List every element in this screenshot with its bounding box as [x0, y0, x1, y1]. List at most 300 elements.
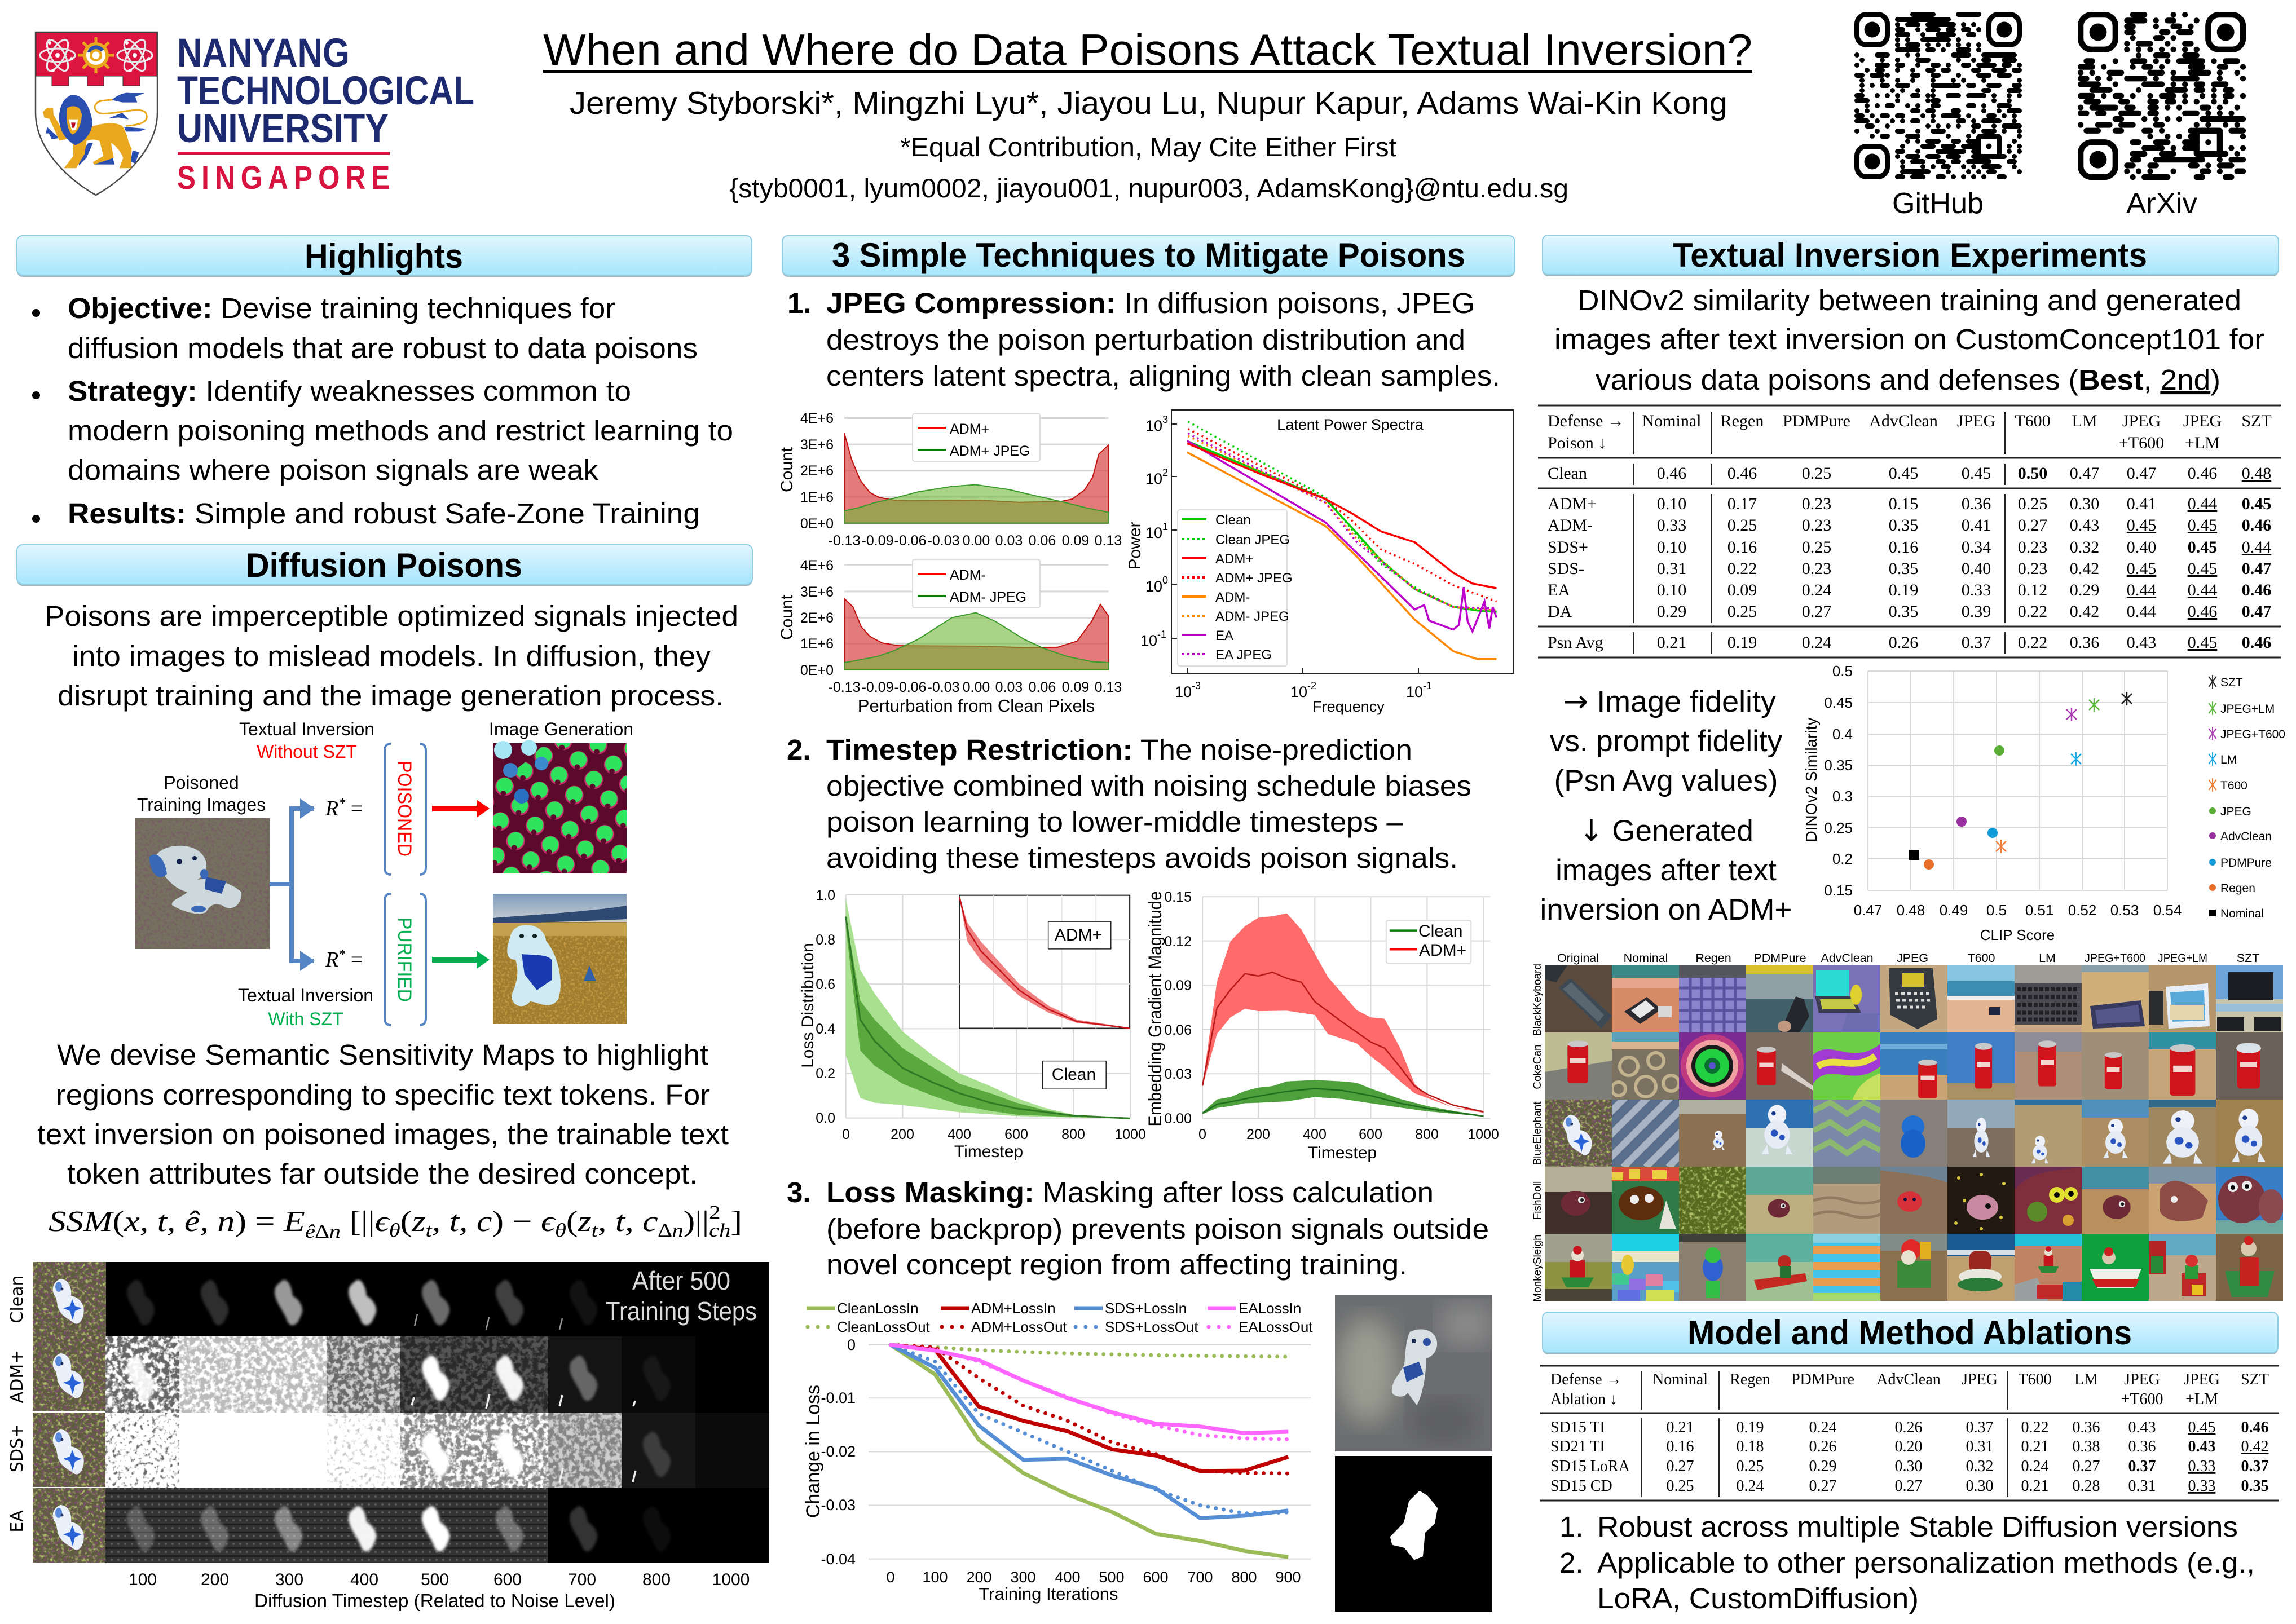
- logo wordmark: TECHNOLOGICAL: [177, 69, 474, 113]
- table: model ablations: 0.16: [1666, 1438, 1694, 1455]
- table: defenses vs poisons: [1538, 405, 2281, 657]
- heatmap axis title: Diffusion Timestep (Related to Noise Level): [254, 1590, 615, 1611]
- grid row labels: CokeCan: [1532, 1044, 1544, 1089]
- chart: ADM- perturbation histogram: [778, 558, 1122, 716]
- table rows: 0.30: [2070, 495, 2099, 513]
- chart: ADM- perturbation histogram: ADM-: [950, 567, 986, 583]
- table: model ablations: 0.37: [2128, 1458, 2156, 1475]
- equation: R star poisoned: *: [338, 796, 345, 811]
- numbered conclusions: [1559, 1511, 2255, 1614]
- technique 1 text: JPEG Compression: In diffusion poisons, JPEG: [826, 287, 1475, 319]
- chart legend: EALossIn: [1239, 1300, 1301, 1317]
- table: model ablations: 0.38: [2072, 1438, 2100, 1455]
- chart: CLIP score vs DINOv2 similarity scatter: 0.45: [1824, 694, 1853, 711]
- chart: ADM+ perturbation histogram: 2E+6: [800, 463, 834, 479]
- table rows: Psn Avg: [1548, 633, 1603, 652]
- image: poisoned training photo: [135, 818, 270, 949]
- chart: ADM- perturbation histogram: 0.13: [1095, 679, 1122, 695]
- table rows: 0.45: [2188, 516, 2217, 535]
- chart: ADM- perturbation histogram: 4E+6: [800, 558, 834, 573]
- table: model ablations: 0.21: [2021, 1477, 2048, 1495]
- SSM paragraph: text inversion on poisoned images, the trainable text: [37, 1118, 729, 1150]
- chart: change in loss: 900: [1275, 1569, 1301, 1586]
- chart: latent power spectra: 10: [1175, 683, 1192, 700]
- chart: embedding gradient magnitude: Embedding Gradient Magnitude: [1145, 891, 1165, 1127]
- chart: ADM- perturbation histogram: Perturbation from Clean Pixels: [858, 696, 1095, 716]
- QR labels: GitHub: [1892, 187, 1984, 220]
- table: model ablations: 0.30: [1966, 1477, 1993, 1495]
- table rows: 0.15: [1889, 495, 1918, 513]
- chart: ADM- perturbation histogram: 0E+0: [800, 663, 834, 678]
- callout: after 500 training steps: Training Steps: [606, 1296, 757, 1326]
- heading: 3 simple techniques: 3 Simple Techniques to Mitigate Poisons: [832, 236, 1465, 274]
- chart: change in loss: 500: [1099, 1569, 1125, 1586]
- chart: CLIP score vs DINOv2 similarity scatter: [1803, 663, 2285, 943]
- technique 3 text: Loss Masking: Masking after loss calculation: [826, 1176, 1434, 1208]
- grid column labels: AdvClean: [1821, 951, 1874, 965]
- grid row labels: FishDoll: [1532, 1181, 1544, 1220]
- technique 2 text: Timestep Restriction: The noise-prediction: [826, 734, 1412, 766]
- intro paragraph: into images to mislead models. In diffusion, they: [72, 640, 711, 672]
- chart: loss distribution: 1.0: [816, 888, 835, 903]
- chart legend: EALossOut: [1239, 1318, 1313, 1335]
- chart: CLIP score vs DINOv2 similarity scatter: 0.47: [1854, 902, 1882, 919]
- icon: GitHub QR code: [1857, 15, 2019, 177]
- heatmap column labels: 1000: [712, 1570, 750, 1589]
- chart: ADM+ perturbation histogram: 0.03: [995, 533, 1023, 549]
- table: model ablations: SD15 LoRA: [1550, 1458, 1630, 1475]
- technique 2 text: poison learning to lower-middle timesteps –: [826, 806, 1404, 838]
- chart: loss distribution: 0.6: [816, 977, 835, 992]
- chart: loss distribution: 0: [842, 1127, 850, 1142]
- table rows: 0.19: [1727, 633, 1757, 652]
- chart: latent power spectra: -1: [1157, 629, 1166, 640]
- table rows: 0.25: [2018, 495, 2047, 513]
- chart: latent power spectra: 10: [1290, 683, 1307, 700]
- table rows: 0.44: [2127, 581, 2156, 599]
- chart: loss distribution: 400: [948, 1127, 971, 1142]
- equation: semantic sensitivity map: (: [400, 1206, 412, 1238]
- chart: latent power spectra: 3: [1162, 414, 1168, 425]
- chart: change in loss: 100: [922, 1569, 948, 1586]
- chart: CLIP score vs DINOv2 similarity scatter: 0.25: [1824, 819, 1853, 836]
- chart: latent power spectra: 10: [1140, 632, 1157, 649]
- panel: Highlights: [17, 236, 752, 529]
- spectra legend: Clean: [1215, 513, 1251, 528]
- NTU logo: [36, 31, 474, 196]
- heading: textual inversion experiments: Textual Inversion Experiments: [1673, 236, 2147, 274]
- chart: loss distribution: 0.2: [816, 1066, 835, 1082]
- table rows: 0.46: [1657, 464, 1686, 483]
- table rows: 0.10: [1657, 581, 1686, 599]
- technique 2 text: [787, 734, 1471, 874]
- equation: semantic sensitivity map: SSM (x, t, ê, n ) = E: [49, 1206, 302, 1238]
- panel: Model and Method Ablations: [1540, 1312, 2279, 1614]
- table rows: 0.45: [1962, 464, 1991, 483]
- chart legend: ADM+LossIn: [971, 1300, 1056, 1317]
- chart: CLIP score vs DINOv2 similarity scatter: 0.53: [2110, 902, 2139, 919]
- heatmap column labels: 500: [421, 1570, 449, 1589]
- icon: ArXiv QR code: [2081, 15, 2243, 177]
- table rows: 0.31: [1657, 559, 1686, 578]
- table: model ablations: 0.42: [2241, 1438, 2268, 1455]
- numbered conclusions: 1.: [1559, 1511, 1584, 1543]
- chart: loss distribution: Clean: [1052, 1065, 1096, 1084]
- table header: +T600: [2119, 434, 2164, 452]
- panel: Diffusion Poisons: [7, 545, 769, 1611]
- scatter legend: PDMPure: [2220, 857, 2272, 870]
- spectra legend: EA: [1215, 628, 1233, 643]
- QR labels: [1892, 187, 2197, 220]
- table: model ablations: 0.43: [2128, 1419, 2156, 1436]
- chart: ADM- perturbation histogram: -0.06: [894, 679, 926, 695]
- chart: embedding gradient magnitude: 1000: [1467, 1127, 1499, 1142]
- table rows: 0.46: [1727, 464, 1757, 483]
- table header: JPEG: [2183, 412, 2222, 430]
- table rows: 0.25: [1727, 602, 1757, 621]
- grid column labels: SZT: [2237, 951, 2259, 965]
- grid column labels: JPEG+T600: [2085, 951, 2145, 965]
- table: model ablations: 0.24: [2021, 1458, 2048, 1475]
- table: model ablations: 0.33: [2188, 1477, 2215, 1495]
- table: model ablations: 0.26: [1809, 1438, 1836, 1455]
- side note: fidelity and generated images: images after text: [1555, 854, 1777, 887]
- bulleted highlights text: Objective: Devise training techniques for: [68, 292, 615, 324]
- equation: semantic sensitivity map: t: [592, 1220, 599, 1241]
- chart: embedding gradient magnitude: 0.00: [1164, 1111, 1192, 1127]
- panel: Textual Inversion Experiments: [1532, 235, 2285, 1302]
- table header: +LM: [2185, 434, 2220, 452]
- table rows: 0.46: [2242, 516, 2271, 535]
- panel: 3 Simple Techniques: [778, 236, 1515, 1612]
- chart: ADM- perturbation histogram: -0.03: [928, 679, 959, 695]
- grid column labels: JPEG+LM: [2158, 951, 2207, 965]
- chart: ADM- perturbation histogram: 0.03: [995, 679, 1023, 695]
- chart: change in loss: -0.02: [821, 1443, 856, 1460]
- grid row: FishDoll: [1545, 1167, 2284, 1234]
- table rows: 0.42: [2070, 559, 2099, 578]
- heading: textual inversion experiments: [1543, 235, 2279, 276]
- heatmap column labels: 600: [493, 1570, 522, 1589]
- chart: change in loss: 600: [1143, 1569, 1169, 1586]
- table rows: 0.47: [2242, 602, 2271, 621]
- scatter legend: LM: [2220, 753, 2237, 766]
- authors: Jeremy Styborski*, Mingzhi Lyu*, Jiayou Lu, Nupur Kapur, Adams Wai-Kin Kong: [570, 85, 1727, 121]
- chart: embedding gradient magnitude: [1145, 889, 1499, 1162]
- table: model ablations: 0.31: [2128, 1477, 2156, 1495]
- table: model ablations: 0.46: [2241, 1419, 2268, 1436]
- grid row labels: [1532, 964, 1544, 1302]
- arrow: split to both branches: [270, 798, 315, 971]
- bracket: PURIFIED: PURIFIED: [394, 917, 415, 1002]
- table rows: SDS+: [1548, 538, 1588, 557]
- heatmap column labels: 100: [129, 1570, 157, 1589]
- grid column labels: Regen: [1695, 951, 1731, 965]
- chart legend: CleanLossOut: [837, 1318, 931, 1335]
- table: model ablations: 0.24: [1809, 1419, 1836, 1436]
- chart: CLIP score vs DINOv2 similarity scatter: 0.49: [1940, 902, 1968, 919]
- logo wordmark: SINGAPORE: [177, 160, 396, 196]
- equation: semantic sensitivity map: ch: [709, 1220, 730, 1241]
- table rows: 0.25: [1727, 516, 1757, 535]
- SSM paragraph: [37, 1039, 729, 1190]
- table rows: [1548, 464, 2271, 652]
- table rows: 0.50: [2018, 464, 2047, 483]
- heatmap row: SDS+: [105, 1413, 769, 1488]
- scatter legend: JPEG+LM: [2220, 703, 2275, 716]
- side note: fidelity and generated images: (Psn Avg values): [1554, 764, 1778, 797]
- diagram captions: Training Images: [137, 795, 266, 815]
- table: model ablations: 0.37: [1966, 1419, 1993, 1436]
- table rows: DA: [1548, 602, 1572, 621]
- numbered conclusions: Applicable to other personalization methods (e.g.,: [1597, 1547, 2255, 1579]
- table: model ablations: LM: [2074, 1371, 2098, 1388]
- spectra legend: Clean JPEG: [1215, 532, 1290, 548]
- equation: semantic sensitivity map: ∆n: [658, 1220, 684, 1241]
- technique 3 text: [787, 1176, 1489, 1281]
- chart: change in loss: 700: [1187, 1569, 1213, 1586]
- heading: Highlights: [17, 236, 752, 277]
- table: model ablations: Nominal: [1652, 1371, 1708, 1388]
- heading: Diffusion Poisons: [17, 545, 752, 586]
- scatter legend: JPEG: [2220, 805, 2251, 818]
- chart: change in loss: Training Iterations: [979, 1584, 1118, 1604]
- table rows: 0.17: [1727, 495, 1757, 513]
- table: model ablations: 0.30: [1895, 1458, 1922, 1475]
- bulleted highlights text: [32, 292, 733, 529]
- description paragraph: DINOv2 similarity between training and generated: [1577, 284, 2241, 316]
- chart: ADM- perturbation histogram: 2E+6: [800, 610, 834, 626]
- heading: Diffusion Poisons: Diffusion Poisons: [246, 546, 522, 584]
- technique 3 text: (before backprop) prevents poison signals outside: [826, 1213, 1489, 1245]
- grid column labels: PDMPure: [1753, 951, 1806, 965]
- chart: loss distribution: 600: [1004, 1127, 1028, 1142]
- table: model ablations: 0.19: [1736, 1419, 1764, 1436]
- chart: change in loss: -0.01: [821, 1389, 856, 1406]
- chart: CLIP score vs DINOv2 similarity scatter: 0.51: [2025, 902, 2053, 919]
- bulleted highlights text: modern poisoning methods and restrict learning to: [68, 414, 733, 447]
- bracket: PURIFIED: [385, 894, 426, 1025]
- chart: loss distribution: 800: [1061, 1127, 1085, 1142]
- table rows: 0.39: [1962, 602, 1991, 621]
- table: model ablations: 0.43: [2188, 1438, 2215, 1455]
- chart: loss distribution: 1000: [1114, 1127, 1146, 1142]
- table rows: 0.47: [2070, 464, 2099, 483]
- chart: change in loss: [803, 1300, 1313, 1604]
- header band: [36, 15, 2243, 220]
- table rows: EA: [1548, 581, 1570, 599]
- table: model ablations: 0.36: [2072, 1419, 2100, 1436]
- scatter legend: [2209, 675, 2285, 920]
- spectra legend: EA JPEG: [1215, 647, 1272, 663]
- chart: loss distribution: 200: [891, 1127, 914, 1142]
- chart: ADM+ perturbation histogram: ADM+ JPEG: [950, 443, 1030, 459]
- table: model ablations: +LM: [2185, 1391, 2218, 1408]
- chart: ADM+ perturbation histogram: 1E+6: [800, 489, 834, 505]
- chart: latent power spectra: 10: [1145, 578, 1162, 595]
- table rows: 0.36: [2070, 633, 2099, 652]
- table header: JPEG: [1957, 412, 1995, 430]
- spectra legend: [1178, 510, 1293, 666]
- table header: PDMPure: [1783, 412, 1850, 430]
- heading: model and method ablations: [1543, 1312, 2278, 1354]
- chart: latent power spectra: 2: [1162, 467, 1168, 478]
- heatmap: semantic sensitivity maps by timestep: [7, 1262, 769, 1611]
- heatmap row: Clean: [127, 1280, 597, 1330]
- chart: ADM+ perturbation histogram: -0.03: [928, 533, 959, 549]
- table rows: 0.43: [2070, 516, 2099, 535]
- chart: loss distribution: [799, 888, 1146, 1161]
- chart: latent power spectra: -2: [1307, 680, 1316, 691]
- equation: semantic sensitivity map: , t, c: [432, 1206, 492, 1238]
- chart: ADM+ perturbation histogram: 4E+6: [800, 411, 834, 426]
- heatmap column labels: 700: [568, 1570, 596, 1589]
- table rows: 0.36: [1962, 495, 1991, 513]
- table rows: 0.45: [2188, 538, 2217, 557]
- chart: embedding gradient magnitude: 0.15: [1164, 889, 1192, 905]
- table: model ablations: PDMPure: [1791, 1371, 1854, 1388]
- grid row: BlueElephant: [1545, 1088, 2283, 1167]
- table rows: 0.41: [1962, 516, 1991, 535]
- logo wordmark: UNIVERSITY: [177, 107, 389, 151]
- table rows: 0.35: [1889, 559, 1918, 578]
- table header: SZT: [2241, 412, 2272, 430]
- arrow: green to purified output: [432, 951, 490, 969]
- chart: ADM+ perturbation histogram: 3E+6: [800, 437, 834, 453]
- technique 3 text: 3.: [787, 1176, 811, 1208]
- table rows: 0.34: [1962, 538, 1991, 557]
- image: loss mask: [1335, 1456, 1492, 1612]
- chart: ADM+ perturbation histogram: 0.09: [1062, 533, 1089, 549]
- table rows: 0.24: [1802, 633, 1831, 652]
- table: model ablations: SD21 TI: [1550, 1438, 1605, 1455]
- grid row labels: BlackKeyboard: [1532, 964, 1544, 1036]
- table: model ablations: JPEG: [2124, 1371, 2160, 1388]
- table rows: ADM-: [1548, 516, 1593, 535]
- spectra legend: ADM+: [1215, 551, 1253, 567]
- table: model ablations: SZT: [2241, 1371, 2269, 1388]
- chart: latent power spectra: 0: [1162, 575, 1168, 586]
- table: model ablations: [1540, 1366, 2279, 1501]
- SSM paragraph: token attributes far outside the desired concept.: [67, 1158, 698, 1190]
- equation: semantic sensitivity map: ϵ: [375, 1206, 387, 1238]
- table rows: 0.44: [2188, 581, 2217, 599]
- chart: change in loss: 0: [886, 1569, 895, 1586]
- contact emails: {styb0001, lyum0002, jiayou001, nupur003, AdamsKong}@ntu.edu.sg: [729, 173, 1568, 203]
- numbered conclusions: LoRA, CustomDiffusion): [1597, 1582, 1919, 1614]
- table rows: 0.23: [1802, 559, 1831, 578]
- chart: loss distribution: 0.8: [816, 932, 835, 948]
- chart: embedding gradient magnitude: 600: [1359, 1127, 1382, 1142]
- table rows: 0.42: [2070, 602, 2099, 621]
- chart: loss distribution: Timestep: [954, 1142, 1023, 1161]
- table rows: 0.29: [2070, 581, 2099, 599]
- table rows: 0.44: [2127, 602, 2156, 621]
- chart: change in loss: Change in Loss: [803, 1385, 824, 1518]
- chart legend: ADM+LossOut: [971, 1318, 1068, 1335]
- scatter legend: AdvClean: [2220, 830, 2272, 843]
- icon: university shield: [36, 32, 157, 195]
- chart: CLIP score vs DINOv2 similarity scatter: 0.5: [1986, 902, 2007, 919]
- equation: semantic sensitivity map: [||: [341, 1206, 375, 1238]
- grid row: BlackKeyboard: [1545, 965, 2283, 1032]
- chart: latent power spectra: Frequency: [1312, 698, 1385, 715]
- spectra legend: ADM-: [1215, 590, 1250, 605]
- table: model ablations: 0.27: [1809, 1477, 1836, 1495]
- bracket: POISONED: [385, 744, 426, 875]
- callout: after 500 training steps: [606, 1266, 757, 1326]
- table: model ablations: 0.37: [2241, 1458, 2268, 1475]
- technique 1 text: centers latent spectra, aligning with clean samples.: [826, 360, 1500, 392]
- table: model ablations: SD15 TI: [1550, 1419, 1605, 1436]
- technique 1 text: 1.: [787, 287, 812, 319]
- heatmap row: EA: [105, 1488, 671, 1563]
- equal contribution note: *Equal Contribution, May Cite Either First: [900, 132, 1396, 162]
- scatter legend: JPEG+T600: [2220, 728, 2285, 741]
- table header: JPEG: [2122, 412, 2161, 430]
- logo wordmark: [177, 31, 474, 196]
- table rows: 0.22: [2018, 633, 2047, 652]
- heatmap row labels: ADM+: [7, 1350, 27, 1403]
- chart: CLIP score vs DINOv2 similarity scatter: 0.2: [1832, 850, 1853, 867]
- chart: ADM- perturbation histogram: -0.09: [862, 679, 893, 695]
- equation: semantic sensitivity map: t: [425, 1220, 433, 1241]
- grid column labels: LM: [2039, 951, 2056, 965]
- diagram captions: Poisoned: [164, 773, 239, 793]
- spectra legend: ADM- JPEG: [1215, 609, 1289, 624]
- chart: CLIP score vs DINOv2 similarity scatter: 0.35: [1824, 757, 1853, 774]
- table: model ablations: +T600: [2121, 1391, 2163, 1408]
- table rows: 0.23: [2018, 559, 2047, 578]
- table header: [1548, 412, 2272, 452]
- bulleted highlights text: diffusion models that are robust to data poisons: [68, 332, 698, 364]
- chart: CLIP score vs DINOv2 similarity scatter: CLIP Score: [1980, 926, 2055, 943]
- table rows: 0.41: [2127, 495, 2156, 513]
- table rows: 0.32: [2070, 538, 2099, 557]
- diagram captions: [137, 719, 633, 1029]
- table: model ablations: JPEG: [2184, 1371, 2220, 1388]
- chart: embedding gradient magnitude: 200: [1246, 1127, 1270, 1142]
- chart: embedding gradient magnitude: 0: [1198, 1127, 1206, 1142]
- description paragraph: images after text inversion on CustomConcept101 for: [1554, 323, 2264, 355]
- chart: ADM+ perturbation histogram: 0.13: [1095, 533, 1122, 549]
- grid column labels: JPEG: [1897, 951, 1928, 965]
- image: poisoned generation: [493, 740, 627, 873]
- table header: LM: [2072, 412, 2097, 430]
- side note: fidelity and generated images: → Image fidelity: [1563, 685, 1777, 719]
- chart: ADM+ perturbation histogram: 0E+0: [800, 516, 834, 532]
- table: model ablations: 0.28: [2072, 1477, 2100, 1495]
- chart: change in loss: 800: [1231, 1569, 1257, 1586]
- heatmap row labels: [7, 1275, 27, 1533]
- table rows: 0.47: [2242, 559, 2271, 578]
- technique 1 text: destroys the poison perturbation distribution and: [826, 324, 1465, 356]
- table rows: 0.45: [2127, 559, 2156, 578]
- description paragraph: various data poisons and defenses ( Best, 2nd): [1596, 364, 2220, 396]
- scatter legend: Regen: [2220, 882, 2255, 895]
- intro paragraph: disrupt training and the image generation process.: [58, 679, 724, 712]
- technique 2 text: objective combined with noising schedule biases: [826, 770, 1471, 802]
- grid column labels: Original: [1557, 951, 1599, 965]
- heatmap column labels: [129, 1570, 750, 1589]
- table rows: 0.10: [1657, 538, 1686, 557]
- table: model ablations: 0.25: [1666, 1477, 1694, 1495]
- chart: latent power spectra: 10: [1145, 524, 1162, 541]
- table rows: 0.40: [2127, 538, 2156, 557]
- equation: semantic sensitivity map: , t, c: [598, 1206, 658, 1238]
- chart: embedding gradient magnitude: 0.06: [1164, 1022, 1192, 1038]
- grid column labels: Nominal: [1624, 951, 1668, 965]
